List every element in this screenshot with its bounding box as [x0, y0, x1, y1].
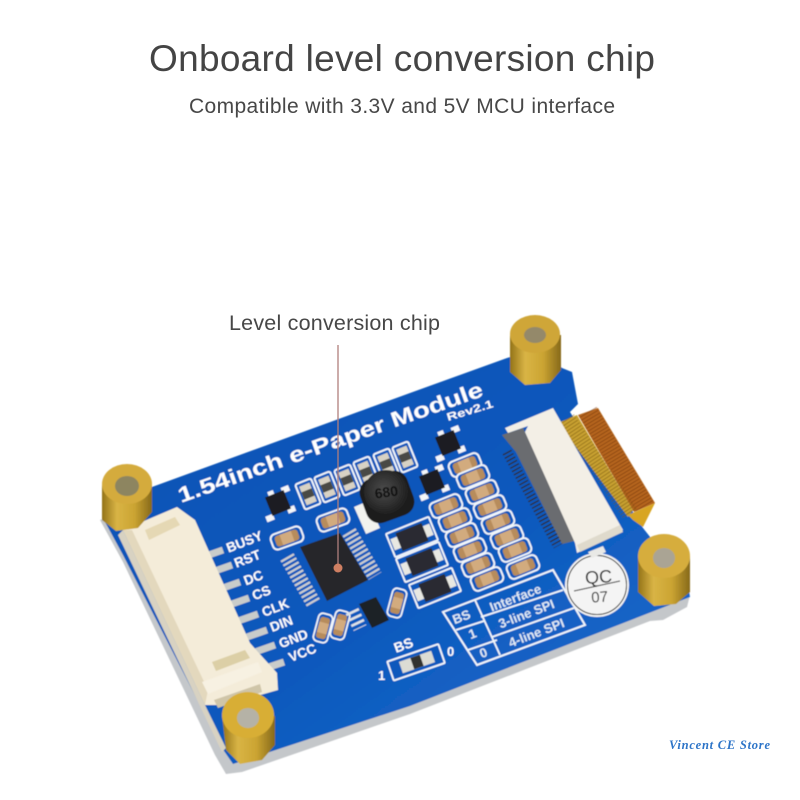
level conversion IC — [287, 532, 375, 604]
pin labels: CS — [250, 582, 273, 603]
brass spacer top-left — [102, 464, 152, 531]
FPC connector — [502, 408, 623, 558]
metal backing plate — [100, 500, 690, 774]
e-paper module board — [100, 315, 690, 774]
blue PCB — [104, 348, 690, 764]
FPC ribbon cable — [558, 408, 655, 527]
pin labels: DIN — [268, 613, 295, 635]
BS interface table: 4-line SPI — [506, 615, 566, 650]
BS jumper: 0 — [447, 644, 454, 659]
capacitor columns — [428, 452, 541, 592]
BS interface table: 0 — [477, 645, 489, 661]
transistors — [257, 424, 468, 522]
BS jumper: 1 — [378, 668, 385, 683]
pin labels: BUSY — [224, 528, 265, 556]
subtitle: Compatible with 3.3V and 5V MCU interface — [189, 95, 615, 118]
BS interface table — [443, 570, 585, 665]
pin pads — [203, 550, 284, 669]
QC sticker — [565, 553, 629, 617]
white header connector — [118, 507, 278, 752]
QC sticker: 07 — [591, 588, 609, 607]
BS interface table: 1 — [466, 626, 478, 642]
pin labels: DC — [242, 567, 265, 588]
revision text: Rev2.1 — [445, 398, 495, 424]
brass spacer bottom-left — [222, 692, 275, 764]
callout leader line — [337, 345, 339, 565]
pin labels: RST — [232, 547, 263, 571]
pin labels: CLK — [260, 596, 291, 620]
BS jumper: BS — [392, 634, 415, 656]
store watermark: Vincent CE Store — [669, 738, 770, 752]
brass spacer right — [638, 534, 690, 606]
title: Onboard level conversion chip — [149, 38, 655, 79]
inductor 680 — [354, 467, 418, 534]
diodes — [386, 517, 461, 608]
pin labels: GND — [277, 626, 310, 651]
small capacitors near chip — [269, 507, 408, 644]
BS interface table: BS — [450, 606, 473, 627]
pin labels: VCC — [286, 641, 319, 665]
brass spacer top — [510, 315, 561, 385]
callout: level conversion chip — [229, 311, 440, 572]
small IC bottom — [352, 597, 389, 628]
pin labels — [224, 528, 319, 665]
BS interface table: Interface — [487, 581, 543, 615]
QC sticker: QC — [584, 566, 613, 588]
callout dot — [334, 564, 342, 572]
PCB title text: 1.54inch e-Paper Module — [175, 378, 486, 508]
top resistors row — [295, 441, 418, 510]
BS interface table: 3-line SPI — [496, 596, 556, 631]
inductor 680: 680 — [374, 482, 399, 502]
callout label: Level conversion chip — [229, 311, 440, 335]
BS jumper — [378, 634, 454, 683]
